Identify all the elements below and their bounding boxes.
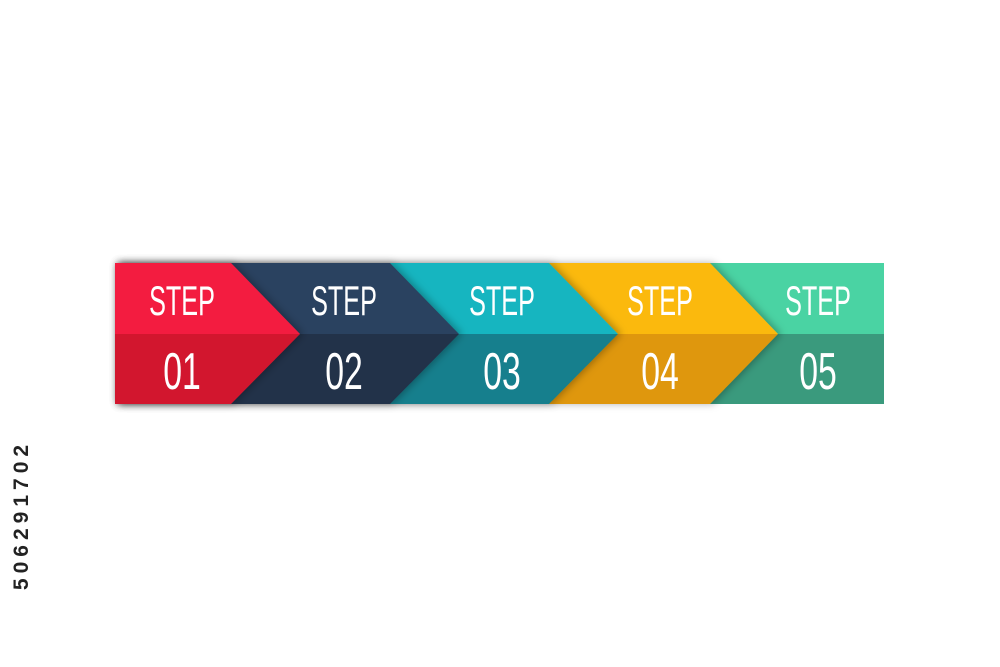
step 1 segment [115, 263, 300, 404]
step 2 segment: STEP [311, 279, 377, 325]
step 3 segment: 03 [483, 343, 521, 401]
step 4 segment: 04 [641, 343, 679, 401]
step 3 segment [115, 263, 618, 404]
step 3 segment: STEP [469, 279, 535, 325]
step 5 segment [115, 263, 884, 404]
step 2 segment: 02 [325, 343, 363, 401]
step 5 segment: STEP [785, 279, 851, 325]
stock id vertical text: 506291702 [10, 440, 33, 590]
step 1 segment: STEP [149, 279, 215, 325]
step 4 segment [115, 263, 778, 404]
step 4 segment: STEP [627, 279, 693, 325]
step 5 segment: 05 [799, 343, 837, 401]
step 2 segment [115, 263, 459, 404]
step 1 segment: 01 [163, 343, 201, 401]
